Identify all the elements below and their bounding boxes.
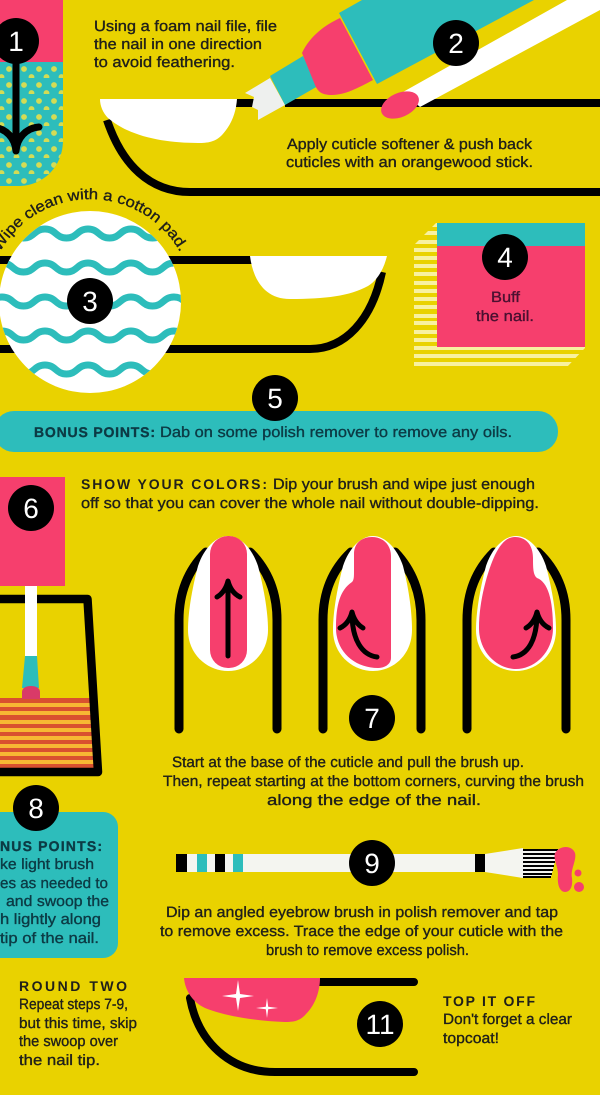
step 11 text: topcoat! bbox=[443, 1030, 499, 1047]
step 6 text bbox=[81, 476, 539, 512]
box text: NUS POINTS: bbox=[0, 838, 102, 854]
badge 2 bbox=[433, 20, 479, 66]
badge 6 bbox=[8, 485, 54, 531]
polish blob and drops bbox=[555, 847, 584, 892]
badge 4: 4 bbox=[497, 242, 513, 273]
step 7 text bbox=[163, 754, 584, 809]
step 10: round two text: the swoop over bbox=[19, 1033, 118, 1050]
white nail bbox=[100, 99, 237, 143]
finger outline bbox=[107, 103, 600, 192]
badge 6: 6 bbox=[23, 493, 39, 524]
cotton pad bbox=[0, 211, 181, 393]
badge 7: 7 bbox=[364, 703, 380, 734]
box text: ke light brush bbox=[0, 856, 94, 873]
orangewood stick bbox=[377, 0, 600, 124]
badge 1 bbox=[0, 18, 39, 64]
step 7 text: Then, repeat starting at the bottom corners, curving the brush bbox=[163, 773, 584, 790]
step 2 text: Apply cuticle softener & push back bbox=[287, 136, 533, 153]
bottle cap bbox=[0, 477, 65, 586]
badge 3: 3 bbox=[82, 286, 98, 317]
polish stripes bbox=[0, 698, 94, 769]
badge 8: 8 bbox=[28, 793, 44, 824]
badge 1: 1 bbox=[8, 26, 24, 57]
step 4: buff bbox=[414, 223, 585, 366]
step 7 text: Start at the base of the cuticle and pull the brush up. bbox=[172, 754, 524, 771]
step 3: cotton pad bbox=[0, 188, 387, 393]
step 6 text: Dip your brush and wipe just enough bbox=[273, 476, 535, 493]
step 6 text: SHOW YOUR COLORS: bbox=[81, 476, 267, 492]
step 2: cuticle softener bbox=[100, 0, 600, 192]
step 9 text: to remove excess. Trace the edge of your cuticle with the bbox=[160, 923, 563, 940]
white nail bbox=[250, 256, 387, 299]
badge 2: 2 bbox=[448, 28, 464, 59]
step 10: round two text: ROUND TWO bbox=[19, 978, 127, 994]
step 5: bonus points bbox=[0, 375, 558, 452]
step 10: round two text: the nail tip. bbox=[19, 1052, 100, 1069]
badge 9: 9 bbox=[364, 848, 380, 879]
badge 3 bbox=[67, 278, 113, 324]
step 2 text bbox=[286, 136, 533, 171]
stripes bbox=[414, 223, 585, 366]
finger outline bbox=[0, 260, 382, 349]
pink nail bbox=[184, 978, 320, 1022]
step 11 text bbox=[443, 993, 572, 1047]
badge 7 bbox=[349, 695, 395, 741]
step 10: round two text: Repeat steps 7-9, bbox=[19, 996, 128, 1013]
nail 2 bbox=[323, 536, 421, 729]
step 11: top coat bbox=[184, 978, 572, 1072]
teal banner bbox=[0, 411, 558, 452]
step 10: round two text: but this time, skip bbox=[19, 1015, 137, 1032]
badge 5 bbox=[252, 375, 298, 421]
banner text bbox=[34, 424, 512, 441]
step 1 text: Using a foam nail file, file bbox=[94, 18, 277, 35]
brush illustration bbox=[176, 848, 558, 878]
banner text: Dab on some polish remover to remove any oils. bbox=[160, 424, 512, 441]
step 1 text: to avoid feathering. bbox=[94, 54, 235, 71]
step 7 text: along the edge of the nail. bbox=[267, 792, 481, 809]
step 4 text: Buff bbox=[491, 289, 521, 306]
box text: es as needed to bbox=[0, 875, 108, 892]
step 1 text bbox=[94, 18, 277, 71]
badge 9 bbox=[349, 840, 395, 886]
box text: h lightly along bbox=[0, 911, 101, 928]
nail file: dotted teal tip bbox=[0, 62, 63, 186]
finger outline bbox=[190, 982, 414, 1072]
step 2 text: cuticles with an orangewood stick. bbox=[286, 154, 533, 171]
box text: and swoop the bbox=[6, 893, 109, 910]
step 9 text: Dip an angled eyebrow brush in polish remover and tap bbox=[166, 904, 558, 921]
badge 5: 5 bbox=[267, 383, 283, 414]
step 10: round two text bbox=[19, 978, 137, 1069]
step 6 text: off so that you can cover the whole nail without double-dipping. bbox=[81, 495, 539, 512]
step 9 text: brush to remove excess polish. bbox=[266, 942, 469, 959]
cuticle softener tube bbox=[245, 0, 534, 120]
badge 11: 11 bbox=[365, 1009, 395, 1040]
buffer block bbox=[437, 223, 585, 347]
box text: tip of the nail. bbox=[0, 930, 99, 947]
step 4 text bbox=[476, 289, 534, 325]
step 1 text: the nail in one direction bbox=[94, 36, 262, 53]
nail file: pink block bbox=[0, 0, 63, 62]
step 6: show your colors bbox=[0, 476, 539, 772]
step 11 text: TOP IT OFF bbox=[443, 993, 535, 1009]
step 4 text: the nail. bbox=[476, 308, 534, 325]
teal box bbox=[0, 812, 118, 958]
box text bbox=[0, 838, 109, 947]
step 9 text bbox=[160, 904, 563, 959]
badge 11 bbox=[357, 1001, 403, 1047]
step 1: file the nail bbox=[0, 0, 277, 186]
nail 3 bbox=[467, 536, 566, 729]
polish bottle outline bbox=[0, 599, 98, 772]
step 7: three nails bbox=[163, 536, 584, 809]
banner text: BONUS POINTS: bbox=[34, 424, 155, 440]
polish brush bbox=[22, 586, 40, 699]
badge 8 bbox=[13, 785, 59, 831]
step 11 text: Don't forget a clear bbox=[443, 1011, 572, 1028]
step 8: bonus points box bbox=[0, 785, 118, 958]
badge 4 bbox=[482, 234, 528, 280]
sparkles bbox=[222, 980, 278, 1018]
nail 1 bbox=[179, 536, 277, 729]
arrow: filing direction bbox=[0, 60, 39, 151]
step 9: eyebrow brush bbox=[160, 840, 584, 959]
